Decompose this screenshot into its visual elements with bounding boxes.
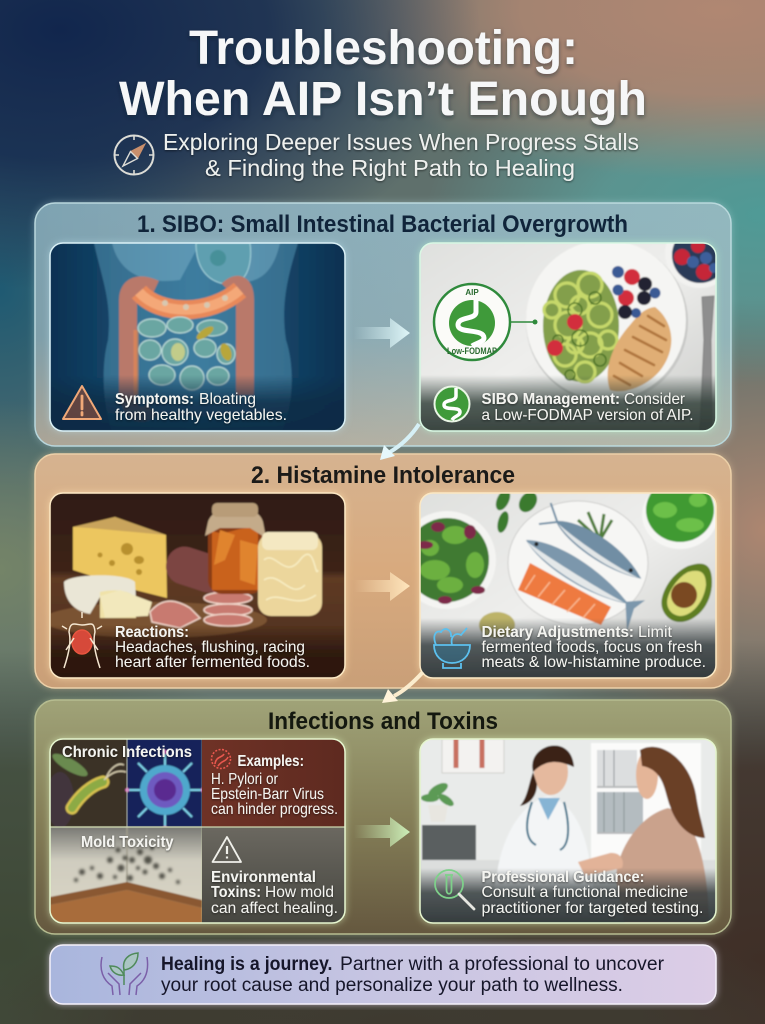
arrow: SIBO to histamine	[380, 424, 419, 460]
text: examples	[211, 753, 338, 818]
icon: gut circle	[434, 386, 470, 422]
text: professional guidance: Professional Guidance:	[482, 869, 644, 886]
image: moldy corner	[50, 827, 202, 923]
text: environmental toxins	[211, 869, 338, 917]
icon: microbe	[212, 750, 230, 768]
card: dietary adjustments	[398, 478, 718, 678]
icon: warning triangle	[63, 386, 101, 419]
icon: toxin warning	[212, 837, 241, 862]
text: SIBO management	[482, 391, 694, 424]
title	[119, 22, 647, 126]
text: examples: can hinder progress.	[211, 801, 338, 818]
heading: histamine: 2. Histamine Intolerance	[251, 462, 515, 489]
text: reactions: heart after fermented foods.	[115, 654, 310, 671]
icon: AIP low-FODMAP badge: Low-FODMAP	[447, 346, 497, 356]
text: SIBO management: SIBO Management:	[482, 391, 620, 408]
illustration: abdomen with intestines	[50, 243, 345, 431]
text: environmental toxins: Toxins:	[211, 884, 261, 901]
illustration: low-FODMAP plate	[420, 244, 716, 430]
arrow: infections to guidance	[354, 817, 410, 847]
card: infections and mold	[46, 739, 345, 923]
text: symptoms: Symptoms:	[115, 391, 194, 408]
text: symptoms: Bloating	[199, 391, 256, 408]
label: mold toxicity: Mold Toxicity	[81, 834, 174, 851]
image: virus	[125, 739, 205, 830]
text: environmental toxins: How mold	[265, 884, 334, 901]
text: reactions: Reactions:	[115, 624, 189, 641]
text: dietary adjustments: meats & low-histamine produce.	[482, 654, 706, 671]
panel: toxins background	[202, 827, 345, 923]
text: reactions	[115, 624, 310, 671]
illustration: fresh fish and greens	[420, 494, 716, 678]
text: examples: Examples:	[238, 753, 304, 770]
text: symptoms: from healthy vegetables.	[115, 407, 287, 424]
arrow: symptoms to management	[354, 318, 410, 348]
text: closing message	[161, 954, 665, 996]
icon: headache face	[62, 612, 102, 668]
heading: SIBO: 1. SIBO: Small Intestinal Bacterial Overgrowth	[137, 211, 628, 238]
arrow: reactions to adjustments	[354, 572, 410, 601]
text: professional guidance	[482, 869, 704, 917]
icon: AIP low-FODMAP badge	[434, 284, 538, 360]
panel: infections and toxins	[35, 700, 731, 934]
text: reactions: Headaches, flushing, racing	[115, 639, 305, 656]
panel: SIBO	[35, 203, 735, 446]
title: Troubleshooting:	[189, 22, 578, 75]
illustration: doctor consultation	[420, 739, 716, 925]
text: closing message: your root cause and personalize your path to wellness.	[161, 975, 623, 996]
text: closing message: Healing is a journey.	[161, 954, 332, 975]
subtitle: & Finding the Right Path to Healing	[205, 155, 575, 181]
image: bacteria	[46, 739, 127, 828]
text: examples: Epstein-Barr Virus	[211, 786, 324, 803]
card: SIBO symptoms	[50, 243, 345, 431]
panel: histamine	[35, 454, 731, 688]
text: environmental toxins: Environmental	[211, 869, 316, 886]
text: closing message: Partner with a professional to uncover	[340, 954, 665, 975]
icon: test tube magnifier	[435, 870, 474, 909]
text: symptoms	[115, 391, 287, 424]
icon: salad bowl	[434, 628, 470, 668]
illustration: aged and fermented foods	[43, 493, 345, 678]
card: professional guidance	[420, 739, 716, 925]
banner: closing message	[50, 945, 716, 1004]
text: SIBO management: a Low-FODMAP version of AIP.	[482, 407, 694, 424]
card: SIBO management	[416, 240, 720, 434]
text: dietary adjustments: Dietary Adjustments:	[482, 624, 634, 641]
text: professional guidance: practitioner for targeted testing.	[482, 900, 704, 917]
title: When AIP Isn’t Enough	[119, 73, 647, 126]
panel: examples background	[202, 739, 345, 827]
heading: infections: Infections and Toxins	[268, 708, 498, 735]
text: dietary adjustments: fermented foods, focus on fresh	[482, 639, 702, 656]
text: environmental toxins: can affect healing.	[211, 900, 338, 917]
subtitle: Exploring Deeper Issues When Progress Stalls	[163, 129, 639, 155]
text: examples: H. Pylori or	[211, 771, 279, 788]
icon: compass	[114, 135, 154, 175]
text: SIBO management: Consider	[624, 391, 686, 408]
text: dietary adjustments: Limit	[638, 624, 673, 641]
icon: hands with sprout	[101, 953, 148, 995]
text: dietary adjustments	[482, 624, 706, 671]
subtitle	[163, 129, 639, 181]
arrow: histamine to infections	[382, 672, 423, 703]
icon: AIP low-FODMAP badge: AIP	[465, 288, 479, 297]
text: professional guidance: Consult a functional medicine	[482, 884, 688, 901]
label: chronic infections: Chronic Infections	[62, 744, 192, 761]
card: histamine reactions	[43, 493, 345, 678]
